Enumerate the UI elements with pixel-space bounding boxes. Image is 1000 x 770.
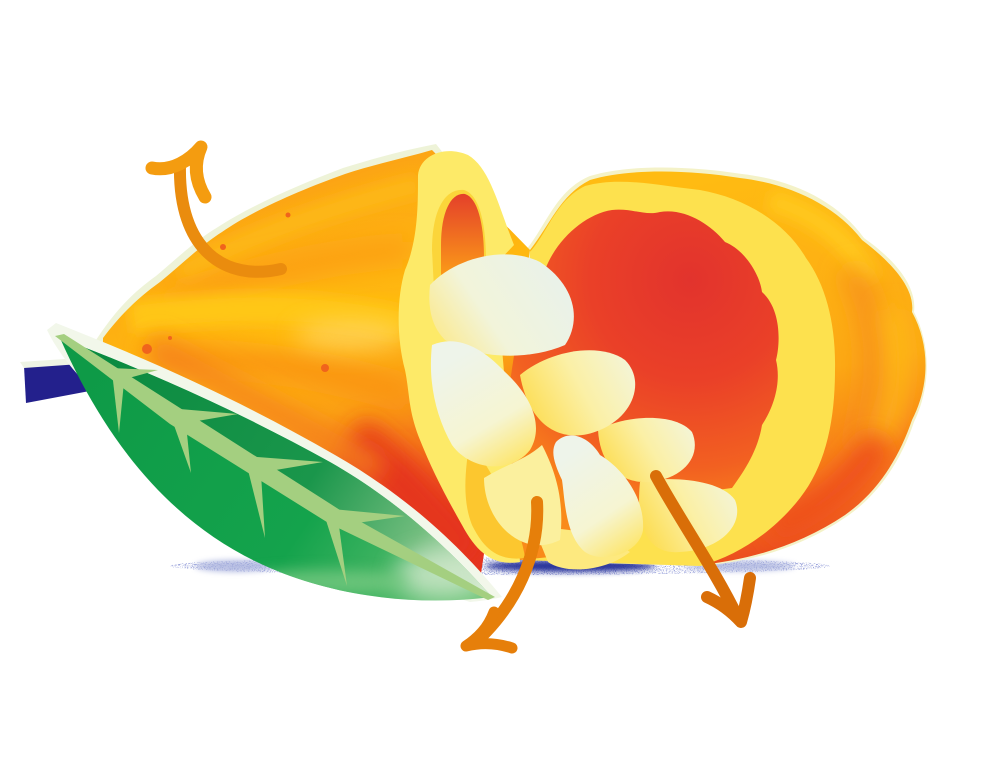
leaf upper half [86, 348, 488, 594]
illustration: opened cacao pod [20, 140, 927, 654]
seed: middle right [598, 418, 695, 482]
arrow: upper left curved [152, 147, 281, 272]
leaf veins [55, 334, 495, 600]
seed: lower center [484, 445, 561, 545]
right pod rim [520, 182, 835, 566]
right pod half [510, 168, 927, 566]
seed: center right [520, 350, 635, 435]
seed: left [431, 341, 536, 466]
seed: front center [553, 435, 643, 557]
seed: far right [639, 479, 737, 552]
leaf [47, 323, 502, 602]
left pod half [90, 140, 530, 590]
stem [20, 358, 95, 403]
pod speckles [142, 212, 329, 372]
arrow: lower center [466, 502, 537, 648]
left pod cut rim [399, 151, 525, 563]
seeds cluster [429, 254, 737, 569]
seed: bottom center [535, 529, 630, 569]
right pod cavity [480, 210, 779, 560]
ground shadow [170, 557, 830, 575]
seed: top [429, 254, 574, 356]
left pod inner cavity [441, 194, 484, 275]
arrow: lower right [656, 476, 750, 622]
